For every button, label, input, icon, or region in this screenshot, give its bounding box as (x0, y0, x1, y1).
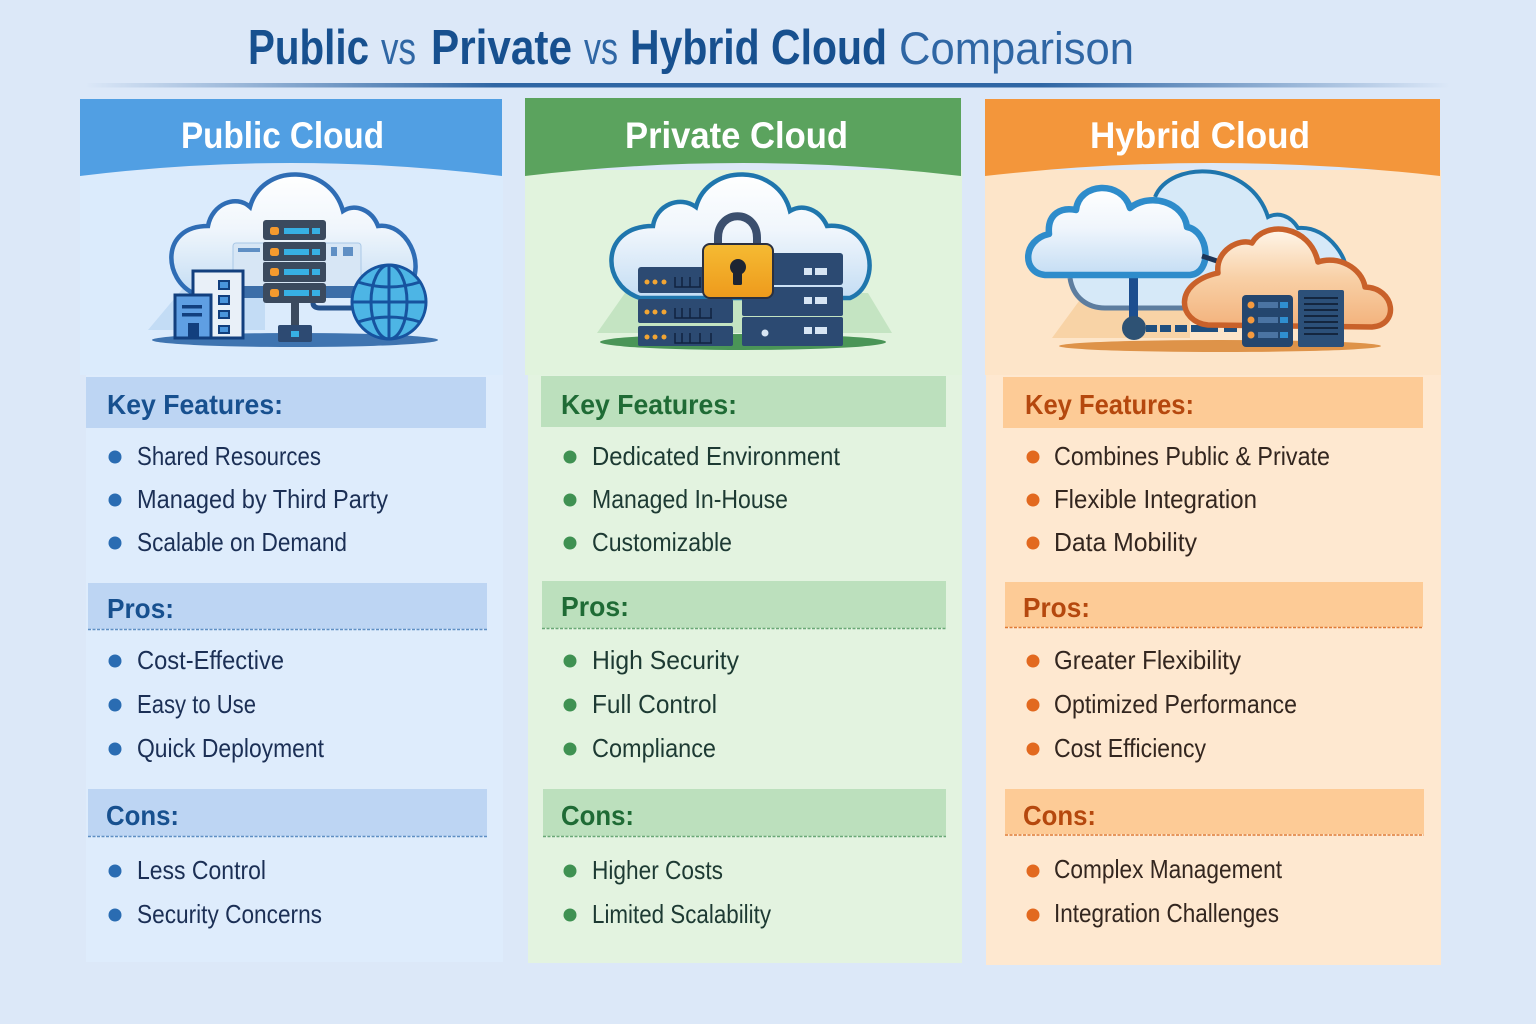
pros list: Cost Efficiency (1054, 733, 1206, 763)
key features list: Dedicated Environment (592, 441, 841, 471)
panel: hybrid cloud (985, 99, 1441, 965)
key features list (108, 441, 388, 557)
pros list: Optimized Performance (1054, 689, 1297, 719)
key features heading (86, 377, 486, 428)
key features list: Combines Public & Private (1054, 441, 1330, 471)
cons heading (88, 789, 487, 836)
cons list: Higher Costs (592, 855, 723, 885)
pros list (108, 645, 325, 763)
pros heading: Pros: (1023, 592, 1090, 623)
key features list: Shared Resources (137, 441, 321, 471)
pros heading (88, 583, 487, 630)
icon: public cloud with server, buildings and globe (148, 174, 438, 347)
pros list: Cost-Effective (137, 645, 284, 675)
key features heading: Key Features: (107, 389, 283, 420)
public cloud header: Public Cloud (181, 115, 384, 156)
key features heading: Key Features: (1025, 389, 1194, 420)
pros list: High Security (592, 645, 739, 675)
title: Private (431, 21, 572, 75)
hybrid cloud header: Hybrid Cloud (1090, 115, 1310, 156)
public cloud header (80, 99, 502, 176)
key features list (564, 441, 841, 557)
cons heading: Cons: (1023, 800, 1096, 831)
cons heading: Cons: (106, 800, 179, 831)
cons list: Integration Challenges (1054, 898, 1279, 928)
title: vs (584, 23, 618, 74)
key features list: Data Mobility (1054, 527, 1197, 557)
panel: public cloud (80, 99, 503, 962)
cons heading: Cons: (561, 800, 634, 831)
cons list: Less Control (137, 855, 266, 885)
key features heading: Key Features: (561, 389, 737, 420)
pros list: Compliance (592, 733, 716, 763)
icon: hybrid cloud with connected public and private clouds (1028, 171, 1390, 352)
pros heading: Pros: (561, 591, 629, 622)
key features list: Flexible Integration (1054, 484, 1257, 514)
private cloud header: Private Cloud (625, 115, 848, 156)
title (248, 21, 1134, 75)
cons list: Limited Scalability (592, 899, 771, 929)
panel: private cloud (525, 98, 962, 963)
pros heading: Pros: (107, 593, 174, 624)
title: Hybrid Cloud (630, 21, 887, 75)
pros heading (542, 581, 946, 628)
title: vs (381, 23, 416, 74)
key features list: Scalable on Demand (137, 527, 347, 557)
pros list (564, 645, 739, 763)
pros list: Greater Flexibility (1054, 645, 1241, 675)
private cloud header (525, 98, 961, 176)
key features list: Customizable (592, 527, 732, 557)
key features heading (1003, 377, 1423, 428)
cons heading (543, 789, 946, 836)
pros heading (1005, 582, 1423, 628)
cons list (1026, 854, 1283, 928)
pros list: Quick Deployment (137, 733, 325, 763)
cons list (564, 855, 771, 929)
icon: private cloud with padlock and servers (597, 174, 892, 350)
pros list: Full Control (592, 689, 717, 719)
cons list: Security Concerns (137, 899, 322, 929)
pros list: Easy to Use (137, 689, 256, 719)
title: Comparison (899, 23, 1134, 74)
pros list (1026, 645, 1297, 763)
cons list: Complex Management (1054, 854, 1283, 884)
cons heading (1005, 789, 1424, 835)
key features list: Managed In-House (592, 484, 788, 514)
key features list: Managed by Third Party (137, 484, 388, 514)
hybrid cloud header (985, 99, 1440, 176)
cons list (108, 855, 322, 929)
title: Public (248, 21, 369, 75)
key features heading (541, 376, 946, 427)
key features list (1026, 441, 1330, 557)
